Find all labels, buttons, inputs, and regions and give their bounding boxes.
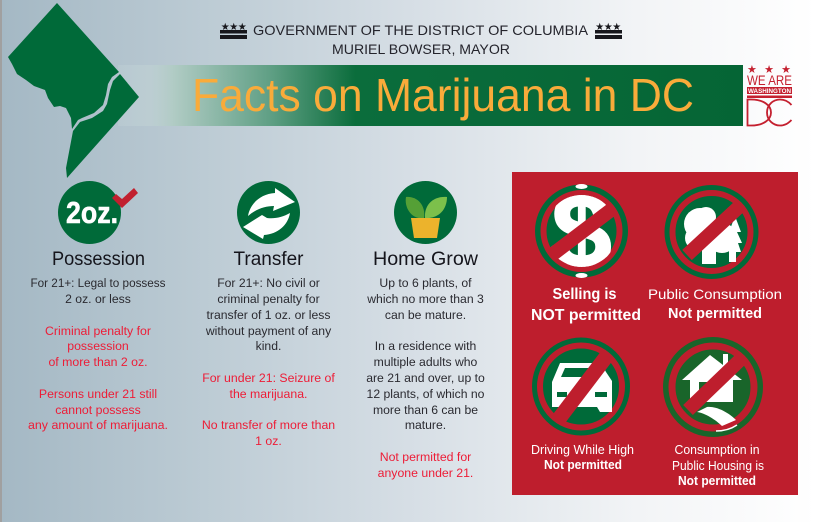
icon: potted plant (394, 181, 457, 244)
label: driving (531, 443, 634, 472)
icon: DC flag right (595, 22, 622, 39)
logo: We Are Washington DC: WE ARE (747, 73, 792, 88)
under 21 text: cannot possess (55, 403, 141, 417)
label: public consumption: Not permitted (668, 306, 762, 322)
limit text: No transfer of more than (202, 418, 335, 432)
plant limit text: can be mature. (385, 308, 466, 322)
icon: no selling (535, 184, 628, 278)
legal text: without payment of any (205, 324, 332, 338)
penalty text: Criminal penalty for (45, 324, 151, 338)
mayor line: MURIEL BOWSER, MAYOR (332, 41, 510, 57)
under 21 text (202, 371, 335, 401)
logo: We Are Washington DC: WASHINGTON (748, 88, 791, 95)
label: selling: Selling is (552, 286, 617, 303)
legal text: For 21+: Legal to possess (30, 276, 166, 290)
plant limit text (366, 276, 484, 322)
label: public housing: Not permitted (678, 474, 756, 488)
penalty text (45, 324, 151, 369)
under 21 text (378, 450, 473, 480)
label: selling: NOT permitted (531, 307, 641, 324)
label: driving: Driving While High (531, 443, 634, 457)
residence text: 12 plants, of which no (367, 387, 485, 401)
header: government line (220, 22, 622, 57)
title banner (118, 65, 743, 126)
label: public consumption: Public Consumption (648, 286, 782, 302)
legal text (205, 276, 332, 353)
logo: We Are Washington DC: ★ ★ ★ (747, 64, 791, 76)
limit text (202, 418, 335, 448)
limit text: 1 oz. (255, 434, 282, 448)
legal text: kind. (256, 339, 281, 353)
heading: transfer: Transfer (234, 249, 304, 270)
legal text: transfer of 1 oz. or less (207, 308, 330, 322)
residence text: In a residence with (375, 339, 476, 353)
under 21 text: any amount of marijuana. (28, 418, 168, 432)
legal text: For 21+: No civil or (217, 276, 320, 290)
under 21 text: anyone under 21. (378, 466, 473, 480)
residence text: multiple adults who (374, 355, 478, 369)
icon: DC flag right: ★★★ (595, 22, 621, 33)
residence text: are 21 and over, up to (366, 371, 485, 385)
icon: no public consumption (664, 185, 758, 279)
penalty text: of more than 2 oz. (48, 355, 148, 369)
icon: transfer arrows (237, 181, 300, 244)
plant limit text: which no more than 3 (366, 292, 484, 306)
under 21 text (28, 387, 168, 432)
government heading: GOVERNMENT OF THE DISTRICT OF COLUMBIA (253, 22, 589, 38)
panel: possession (28, 181, 168, 432)
icon: no consumption in public housing (663, 337, 763, 437)
icon: no driving while high (532, 338, 630, 436)
plant limit text: Up to 6 plants, of (379, 276, 472, 290)
legal text: 2 oz. or less (65, 292, 131, 306)
title: Facts on Marijuana in DC (192, 69, 694, 121)
label: public housing: Consumption in (674, 443, 760, 457)
map of DC (8, 3, 139, 178)
under 21 text: For under 21: Seizure of (202, 371, 335, 385)
panel: prohibited activities (512, 170, 798, 495)
label: public housing (672, 443, 764, 488)
logo: We Are Washington DC (747, 64, 792, 126)
heading: possession: Possession (52, 249, 145, 270)
icon: DC flag left (220, 22, 247, 39)
icon: DC flag left: ★★★ (221, 22, 247, 33)
heading: home grow: Home Grow (373, 249, 478, 270)
icon: 2 oz with check: 2oz. (66, 195, 118, 230)
legal text (30, 276, 166, 306)
label: driving: Not permitted (544, 458, 622, 472)
penalty text: possession (67, 339, 129, 353)
under 21 text: Not permitted for (380, 450, 471, 464)
residence text (366, 339, 485, 432)
under 21 text: Persons under 21 still (39, 387, 157, 401)
label: selling (531, 286, 641, 324)
panel: transfer (202, 181, 335, 448)
legal text: criminal penalty for (217, 292, 320, 306)
residence text: more than 6 can be (373, 403, 478, 417)
icon: 2 oz with check (58, 181, 138, 244)
label: public consumption (648, 286, 782, 322)
under 21 text: the marijuana. (230, 387, 307, 401)
icon: no selling: $ (551, 170, 612, 291)
label: public housing: Public Housing is (672, 459, 764, 473)
panel: home grow (366, 181, 485, 480)
residence text: mature. (405, 418, 446, 432)
